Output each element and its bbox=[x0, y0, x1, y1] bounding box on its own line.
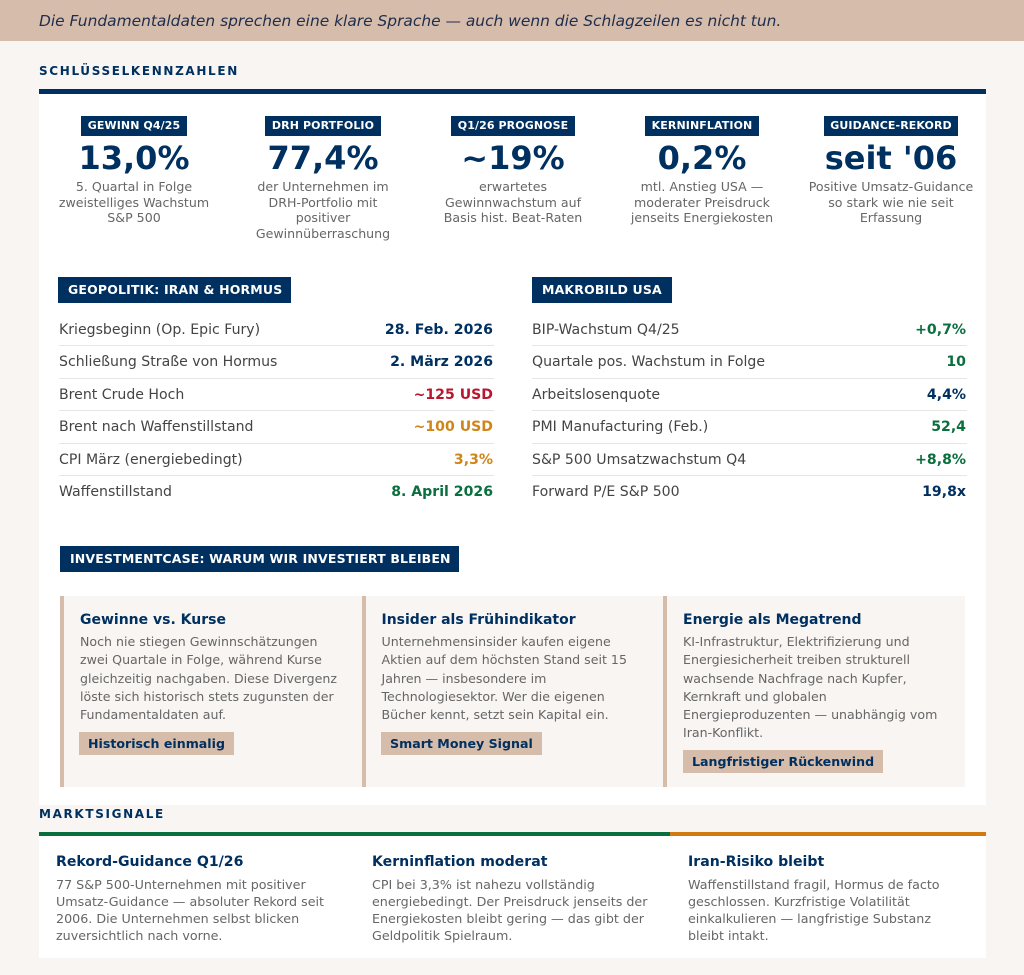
card: Energie als Megatrend: KI-Infrastruktur, Elektrifizierung und bbox=[683, 634, 910, 649]
KPI: Gewinn Q4/25: 13,0% bbox=[78, 139, 190, 177]
table: Geopolitik: Waffenstillstand bbox=[59, 484, 172, 500]
table: Geopolitik: 8. April 2026 bbox=[391, 484, 493, 500]
card: Insider als Frühindikator: Technologiesektor. Wer die eigenen bbox=[382, 689, 605, 704]
card: Insider als Frühindikator: Jahren — insbesondere im bbox=[382, 671, 546, 686]
table: Makrobild: 19,8x bbox=[922, 484, 966, 500]
card: Gewinne vs. Kurse: Historisch einmalig bbox=[88, 736, 225, 751]
signal: Iran-Risiko bbox=[688, 854, 940, 943]
signal: Rekord-Guidance: Umsatz-Guidance — absoluter Rekord seit bbox=[56, 894, 324, 909]
KPI: Gewinn Q4/25: zweistelliges Wachstum bbox=[59, 194, 209, 210]
signal: Iran-Risiko: bleibt intakt. bbox=[688, 928, 769, 943]
table: Geopolitik: CPI März (energiebedingt) bbox=[59, 452, 243, 468]
table: Makrobild: 10 bbox=[946, 354, 966, 370]
signal: Kerninflation moderat: CPI bei 3,3% ist nahezu vollständig bbox=[372, 877, 595, 892]
heading: Geopolitik: GEOPOLITIK: IRAN & HORMUS bbox=[68, 282, 282, 297]
signal: Iran-Risiko: einkalkulieren — langfristige Substanz bbox=[688, 911, 931, 926]
card: Gewinne vs. Kurse bbox=[60, 596, 362, 787]
KPI: Gewinn Q4/25 bbox=[59, 116, 209, 225]
rule: Schlüsselkennzahlen bbox=[39, 89, 986, 94]
signal: Iran-Risiko: Iran-Risiko bleibt bbox=[688, 854, 824, 870]
table: Geopolitik bbox=[59, 322, 494, 500]
card: Gewinne vs. Kurse: zwei Quartale in Folge, während Kurse bbox=[80, 652, 322, 667]
signal: Kerninflation moderat: Kerninflation moderat bbox=[372, 854, 547, 870]
card: Gewinne vs. Kurse: Fundamentaldaten auf. bbox=[80, 707, 226, 722]
KPI: Guidance-Rekord: GUIDANCE-REKORD bbox=[830, 119, 952, 132]
card: Energie als Megatrend: Kernkraft und globalen bbox=[683, 689, 827, 704]
signal: Iran-Risiko: Waffenstillstand fragil, Hormus de facto bbox=[688, 877, 940, 892]
KPI: DRH Portfolio: DRH-Portfolio mit bbox=[268, 194, 377, 210]
table: Makrobild: Forward P/E S&P 500 bbox=[532, 484, 680, 500]
KPI: Kerninflation: moderater Preisdruck bbox=[634, 194, 770, 210]
table: Geopolitik: ~100 USD bbox=[414, 419, 493, 435]
card: Energie als Megatrend: Energiesicherheit treiben strukturell bbox=[683, 652, 910, 667]
KPI: Kerninflation: KERNINFLATION bbox=[652, 119, 752, 132]
KPI: Kerninflation bbox=[630, 116, 773, 225]
table: Geopolitik: Schließung Straße von Hormus bbox=[59, 354, 277, 370]
card: Gewinne vs. Kurse: gleichzeitig nachgaben. Diese Divergenz bbox=[80, 671, 337, 686]
signal: Rekord-Guidance: 2006. Die Unternehmen selbst blicken bbox=[56, 911, 299, 926]
card: Insider als Frühindikator: Unternehmensinsider kaufen eigene bbox=[382, 634, 611, 649]
card: Energie als Megatrend: Energieproduzenten — unabhängig vom bbox=[683, 707, 937, 722]
banner bbox=[0, 0, 1024, 41]
KPI: Guidance-Rekord: Positive Umsatz-Guidance bbox=[809, 179, 973, 194]
KPI: Q1/26 Prognose bbox=[444, 116, 582, 225]
table: Geopolitik: Kriegsbeginn (Op. Epic Fury) bbox=[59, 322, 260, 338]
table: Makrobild: +0,7% bbox=[915, 322, 966, 338]
signal: Kerninflation moderat: Energiekosten bleibt gering — das gibt der bbox=[372, 911, 644, 926]
heading: Marktsignale: MARKTSIGNALE bbox=[39, 807, 165, 821]
card: Insider als Frühindikator: Bücher kennt, setzt sein Kapital ein. bbox=[382, 707, 609, 722]
heading: Makrobild bbox=[532, 277, 672, 303]
card: Gewinne vs. Kurse: löste sich historisch stets zugunsten der bbox=[80, 689, 334, 704]
heading: Geopolitik bbox=[58, 277, 291, 303]
table: Makrobild bbox=[532, 322, 967, 500]
bottom white panel bbox=[39, 836, 986, 958]
table: Makrobild: S&P 500 Umsatzwachstum Q4 bbox=[532, 452, 746, 468]
card: Energie als Megatrend bbox=[663, 596, 965, 787]
signal: Kerninflation moderat bbox=[372, 854, 648, 943]
signal: Rekord-Guidance: 77 S&P 500-Unternehmen mit positiver bbox=[56, 877, 306, 892]
table: Geopolitik: Brent Crude Hoch bbox=[59, 387, 184, 403]
signal: Iran-Risiko: geschlossen. Kurzfristige Volatilität bbox=[688, 894, 910, 909]
card: Insider als Frühindikator: Aktien auf dem höchsten Stand seit 15 bbox=[382, 652, 627, 667]
card: Insider als Frühindikator bbox=[362, 596, 663, 787]
signal: Kerninflation moderat: Geldpolitik Spielraum. bbox=[372, 928, 512, 943]
heading: Schlüsselkennzahlen: SCHLÜSSELKENNZAHLEN bbox=[39, 64, 239, 78]
table: Makrobild: Arbeitslosenquote bbox=[532, 387, 660, 403]
table: Geopolitik: Brent nach Waffenstillstand bbox=[59, 419, 253, 435]
table: Makrobild: +8,8% bbox=[915, 452, 966, 468]
card: Insider als Frühindikator: Smart Money Signal bbox=[390, 736, 533, 751]
signal: Kerninflation moderat: energiebedingt. Der Preisdruck jenseits der bbox=[372, 894, 647, 909]
KPI: Guidance-Rekord bbox=[809, 116, 973, 225]
KPI: DRH Portfolio: der Unternehmen im bbox=[257, 179, 389, 194]
table: Geopolitik: 28. Feb. 2026 bbox=[385, 322, 493, 338]
KPI: Kerninflation: jenseits Energiekosten bbox=[631, 210, 773, 225]
heading: Makrobild: MAKROBILD USA bbox=[542, 282, 662, 297]
signal: Rekord-Guidance: Rekord-Guidance Q1/26 bbox=[56, 854, 243, 870]
card: Energie als Megatrend: Langfristiger Rückenwind bbox=[692, 754, 874, 769]
signal: Rekord-Guidance: zuversichtlich nach vorne. bbox=[56, 928, 222, 943]
card: Energie als Megatrend: Energie als Megatrend bbox=[683, 612, 862, 628]
KPI: Guidance-Rekord: seit '06 bbox=[825, 139, 957, 177]
card: Energie als Megatrend: wachsende Nachfrage nach Kupfer, bbox=[683, 671, 907, 686]
KPI: Q1/26 Prognose: ~19% bbox=[461, 139, 565, 177]
table: Geopolitik: 2. März 2026 bbox=[390, 354, 493, 370]
table: Geopolitik: 3,3% bbox=[454, 452, 493, 468]
KPI: DRH Portfolio: DRH PORTFOLIO bbox=[272, 119, 374, 132]
KPI: Guidance-Rekord: so stark wie nie seit bbox=[828, 194, 954, 210]
KPI: Q1/26 Prognose: erwartetes bbox=[479, 179, 547, 194]
table: Makrobild: PMI Manufacturing (Feb.) bbox=[532, 419, 708, 435]
KPI: DRH Portfolio: Gewinnüberraschung bbox=[256, 226, 390, 240]
KPI: Kerninflation: 0,2% bbox=[658, 139, 746, 177]
signal: Rekord-Guidance bbox=[56, 854, 324, 943]
heading: Investmentcase bbox=[60, 546, 459, 572]
card: Gewinne vs. Kurse: Gewinne vs. Kurse bbox=[80, 612, 226, 628]
card: Energie als Megatrend: Iran-Konflikt. bbox=[683, 725, 763, 740]
KPI: Guidance-Rekord: Erfassung bbox=[860, 210, 922, 225]
KPI: Gewinn Q4/25: S&P 500 bbox=[107, 210, 161, 225]
card: Insider als Frühindikator: Insider als Frühindikator bbox=[382, 612, 576, 628]
KPI: DRH Portfolio bbox=[256, 116, 390, 240]
KPI: Q1/26 Prognose: Basis hist. Beat-Raten bbox=[444, 210, 582, 225]
banner text: Die Fundamentaldaten sprechen eine klare Sprache — auch wenn die Schlagzeilen es nicht tun. bbox=[39, 12, 781, 30]
main white panel bbox=[39, 94, 986, 805]
table: Geopolitik: ~125 USD bbox=[414, 387, 493, 403]
table: Makrobild: 4,4% bbox=[927, 387, 966, 403]
card: Gewinne vs. Kurse: Noch nie stiegen Gewinnschätzungen bbox=[80, 634, 317, 649]
KPI: DRH Portfolio: 77,4% bbox=[267, 139, 378, 177]
table: Makrobild: 52,4 bbox=[931, 419, 966, 435]
heading: Investmentcase: INVESTMENTCASE: WARUM WIR INVESTIERT BLEIBEN bbox=[70, 551, 451, 566]
KPI: DRH Portfolio: positiver bbox=[296, 210, 350, 225]
table: Makrobild: BIP-Wachstum Q4/25 bbox=[532, 322, 680, 338]
rule: Marktsignale bbox=[39, 832, 986, 836]
KPI: Kerninflation: mtl. Anstieg USA — bbox=[641, 179, 763, 194]
table: Makrobild: Quartale pos. Wachstum in Folge bbox=[532, 354, 765, 370]
KPI: Gewinn Q4/25: 5. Quartal in Folge bbox=[76, 179, 192, 194]
KPI: Q1/26 Prognose: Q1/26 PROGNOSE bbox=[458, 119, 568, 132]
KPI: Q1/26 Prognose: Gewinnwachstum auf bbox=[445, 194, 581, 210]
KPI: Gewinn Q4/25: GEWINN Q4/25 bbox=[88, 119, 180, 132]
